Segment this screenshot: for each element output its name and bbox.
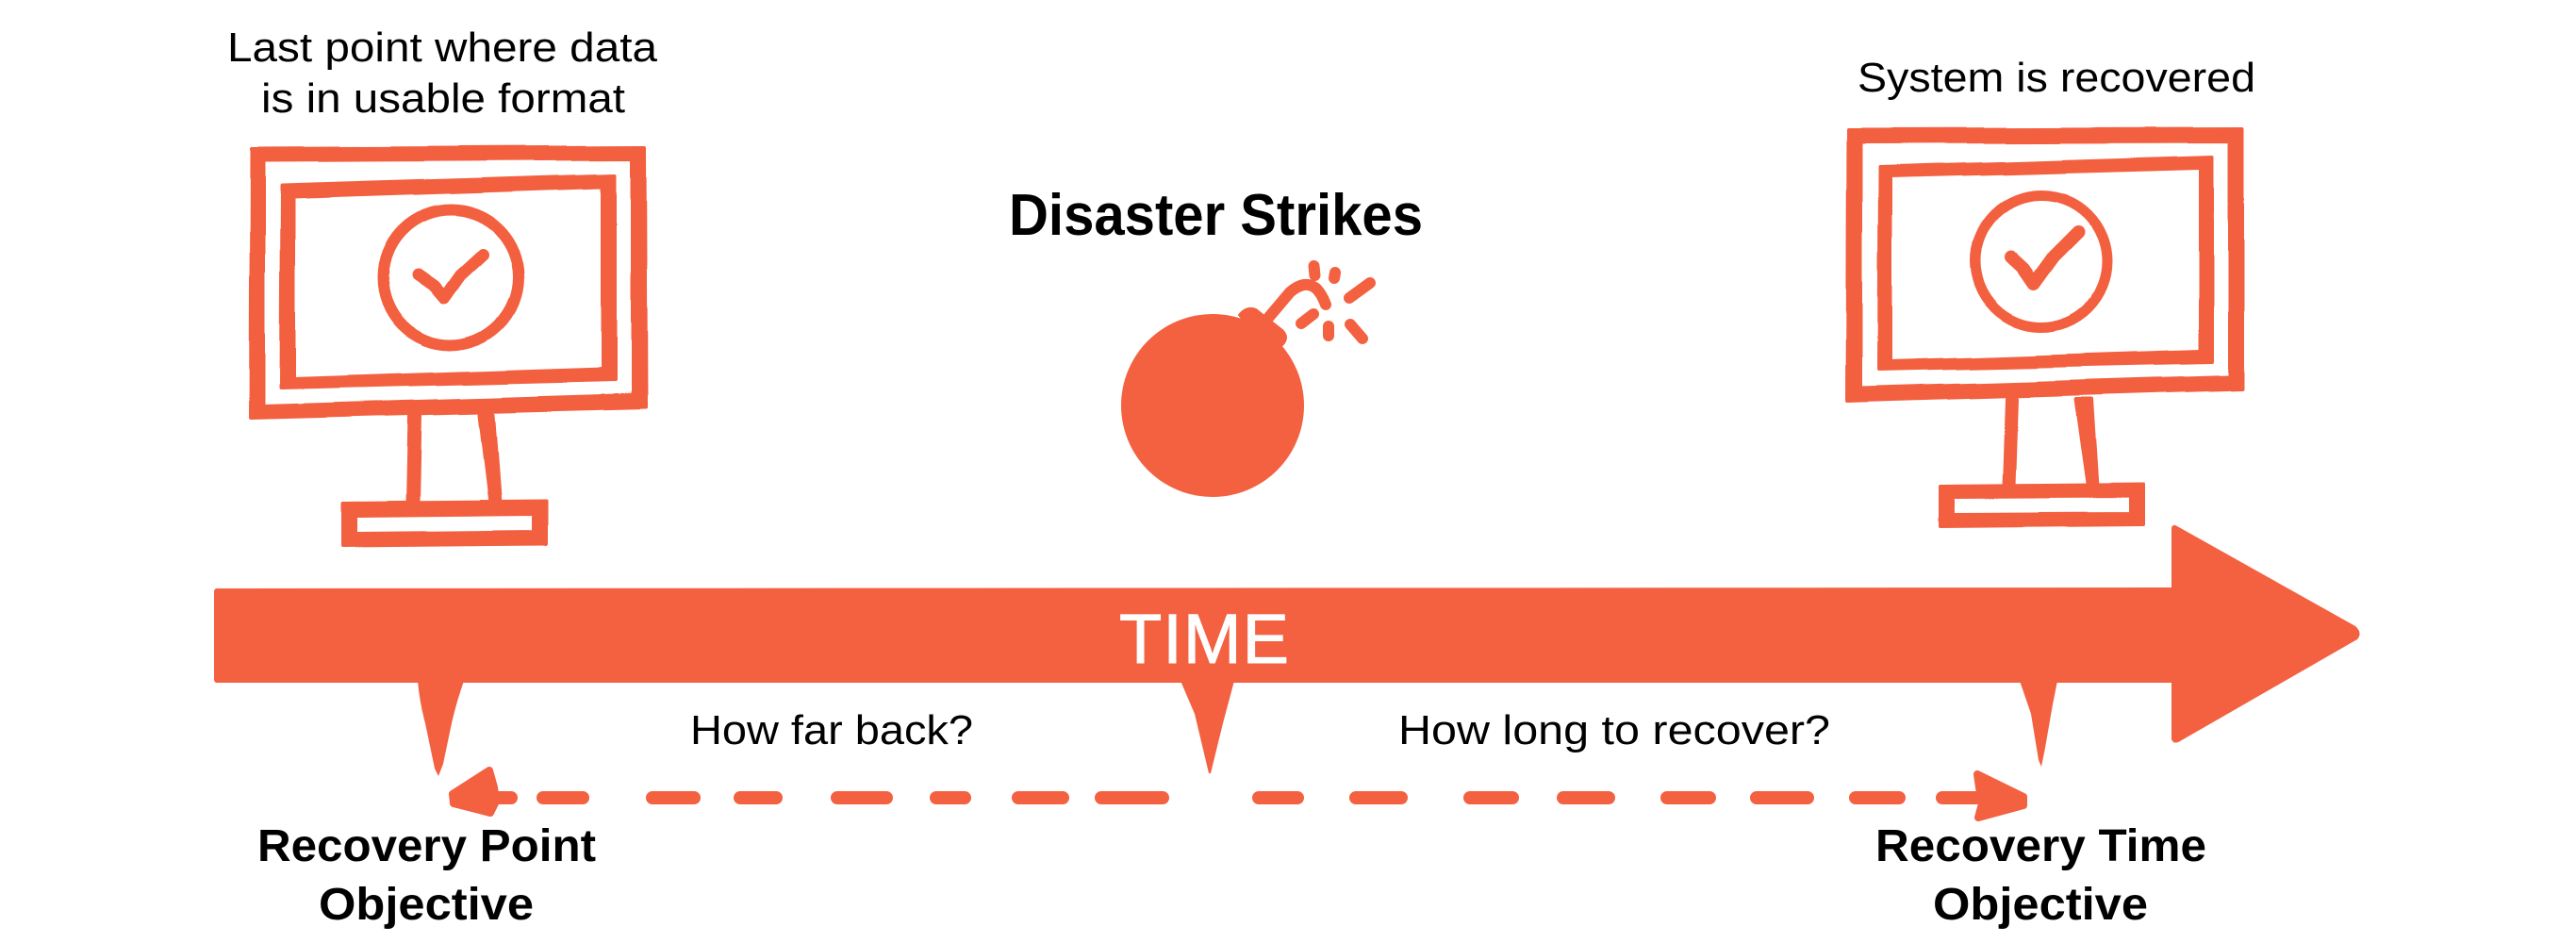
marker: recovery time spike <box>2020 681 2057 767</box>
icon: right monitor with check mark <box>1847 129 2242 526</box>
heading: Disaster Strikes: Disaster Strikes <box>1009 183 1423 248</box>
label: recovery time objective <box>1875 821 2206 930</box>
caption: last point where data is in usable format: is in usable format <box>261 75 625 122</box>
icon: bomb with lit fuse <box>1121 266 1370 497</box>
label: recovery point objective: Recovery Point <box>257 821 596 871</box>
marker: disaster spike <box>1181 681 1234 773</box>
label: recovery point objective <box>257 821 596 930</box>
caption: system is recovered: System is recovered <box>1858 55 2255 101</box>
arrow: main time arrow <box>214 525 2360 743</box>
label: recovery time objective: Recovery Time <box>1875 821 2206 871</box>
text: how far back: How far back? <box>690 707 973 753</box>
text: how long to recover: How long to recover? <box>1398 707 1830 753</box>
label: recovery time objective: Objective <box>1933 880 2148 930</box>
caption: last point where data is in usable format <box>227 25 658 122</box>
marker: recovery point spike <box>418 681 464 776</box>
icon: left monitor with check mark <box>251 147 646 545</box>
label: recovery point objective: Objective <box>319 880 534 930</box>
caption: last point where data is in usable format: Last point where data <box>227 25 658 71</box>
time label: TIME <box>1119 600 1289 678</box>
arrow: dashed double-headed span <box>453 770 2023 818</box>
